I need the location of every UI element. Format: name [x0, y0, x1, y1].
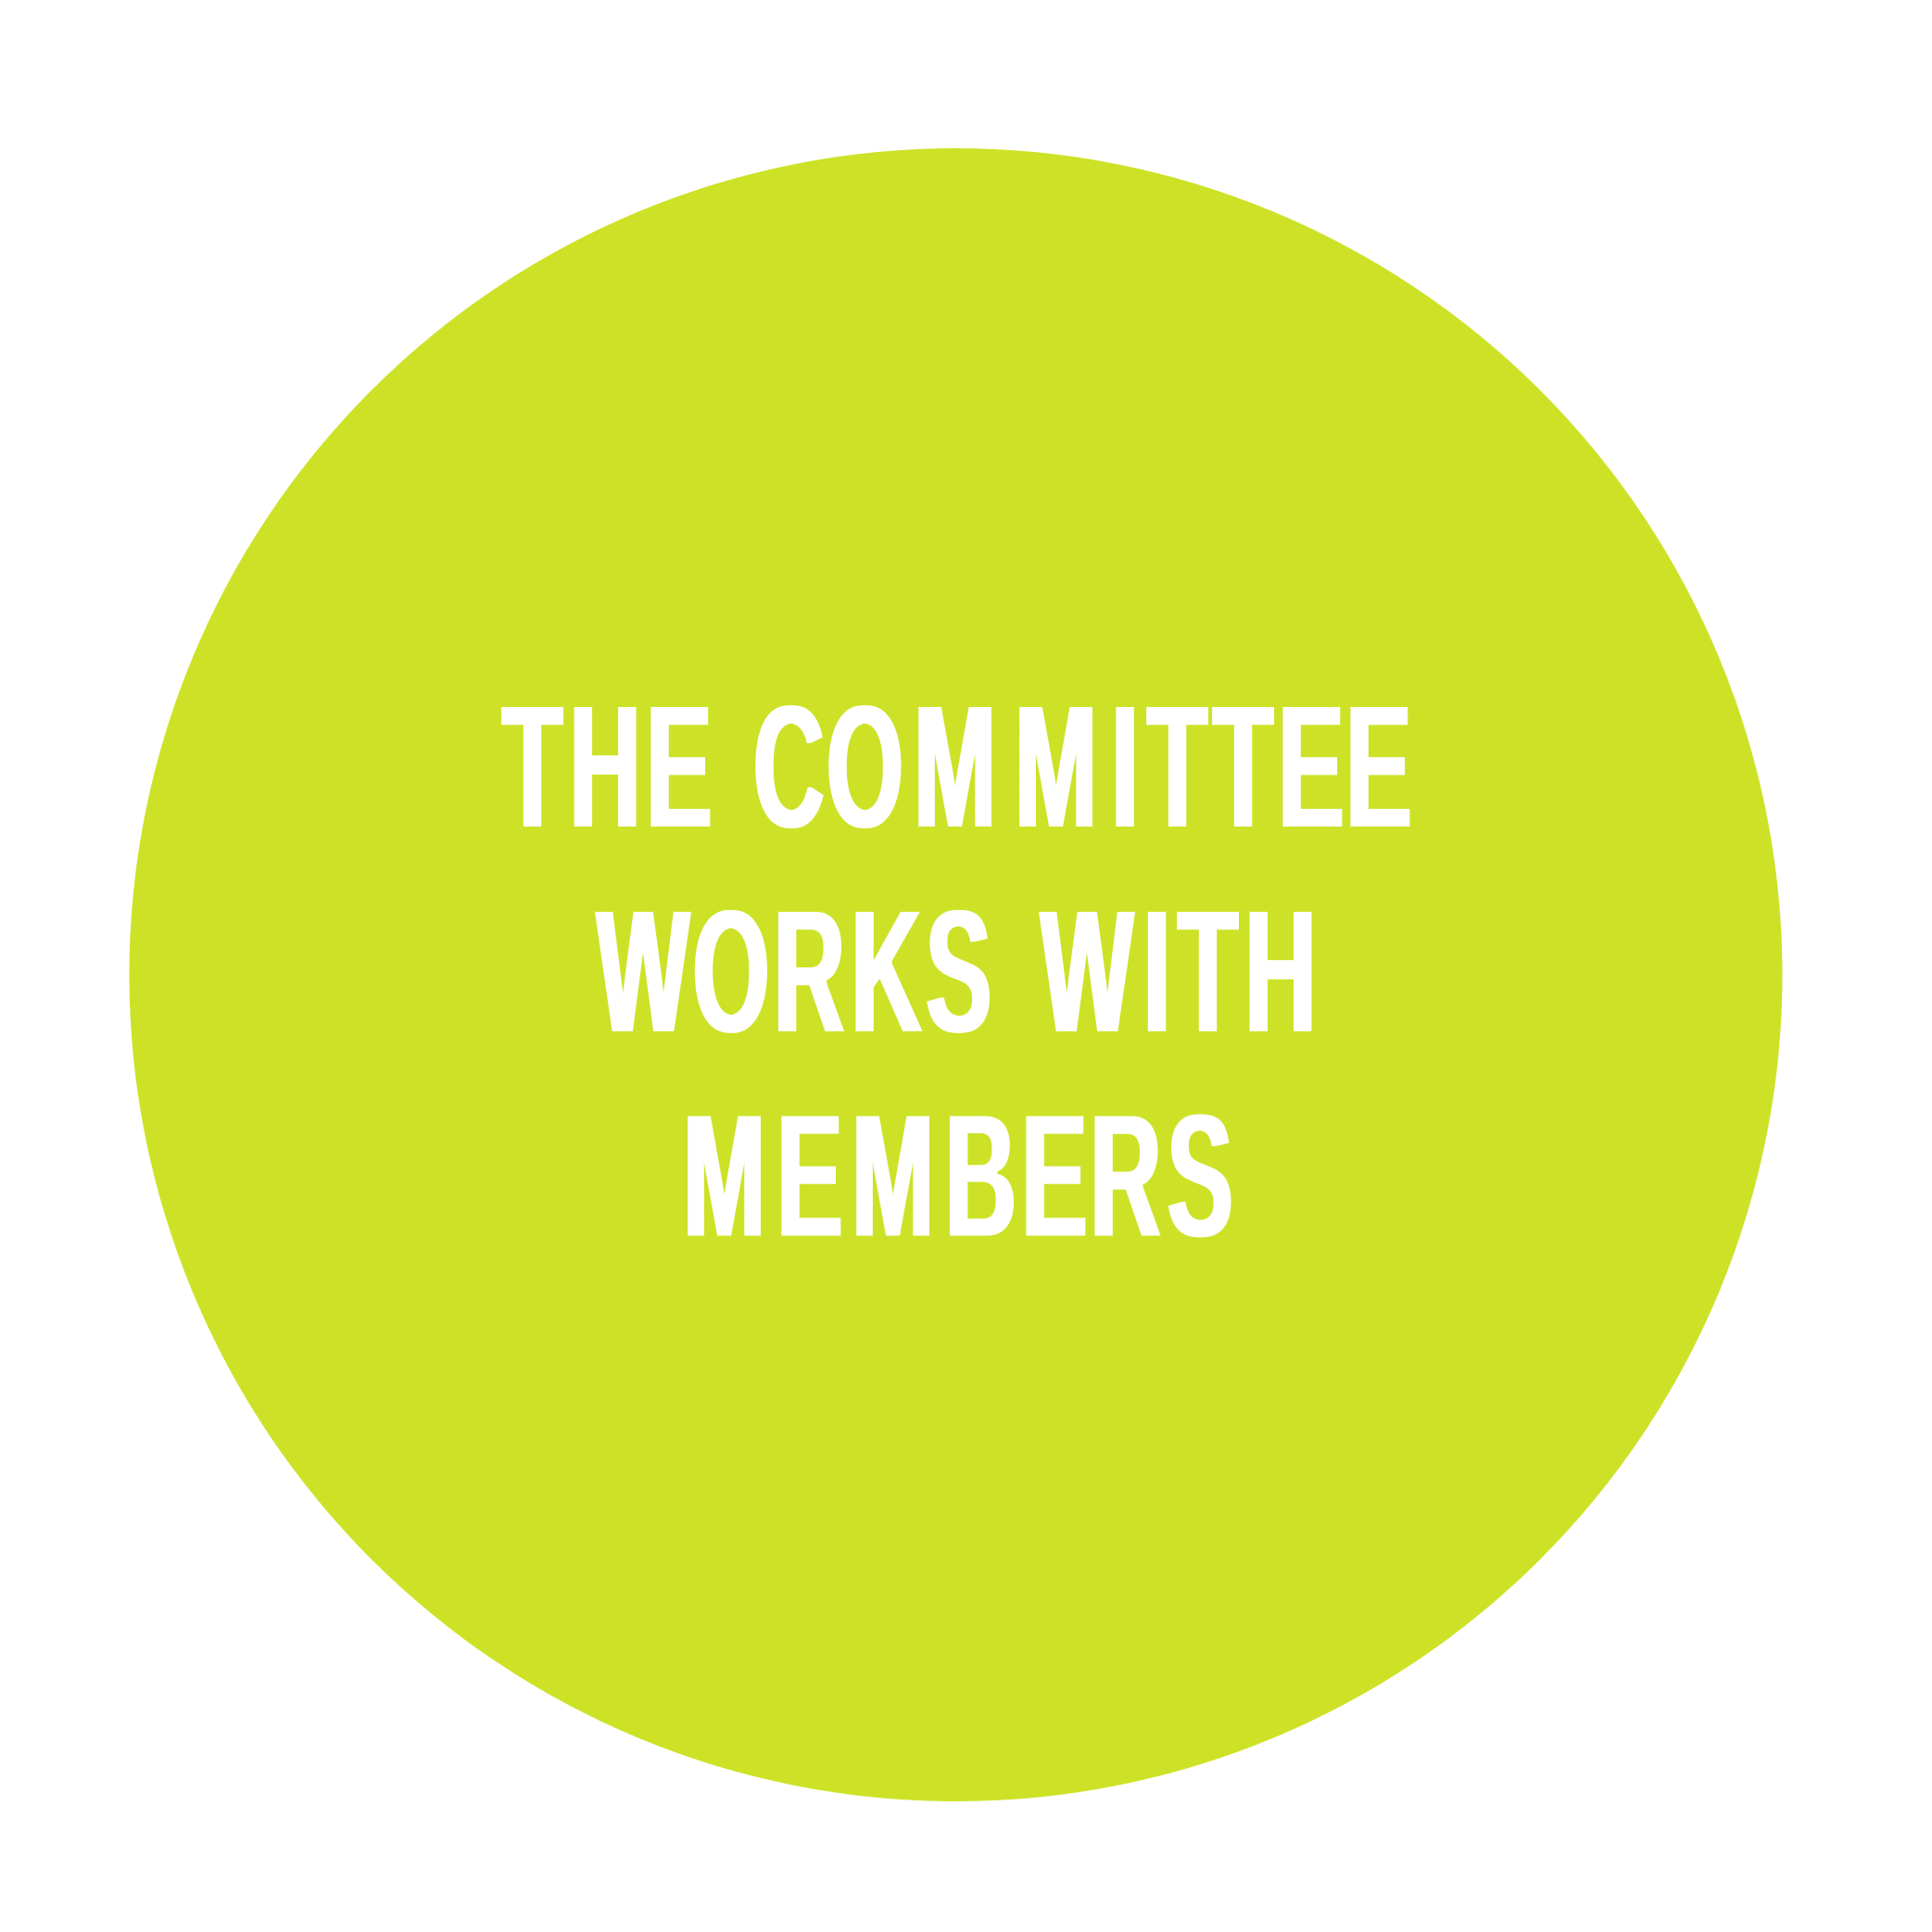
line 1: THE COMMITTEE [502, 667, 1412, 865]
line 3: MEMBERS [683, 1077, 1233, 1274]
lime green circle [130, 148, 1783, 1801]
line 2: WORKS WITH [597, 872, 1317, 1070]
statement text [502, 667, 1412, 1274]
